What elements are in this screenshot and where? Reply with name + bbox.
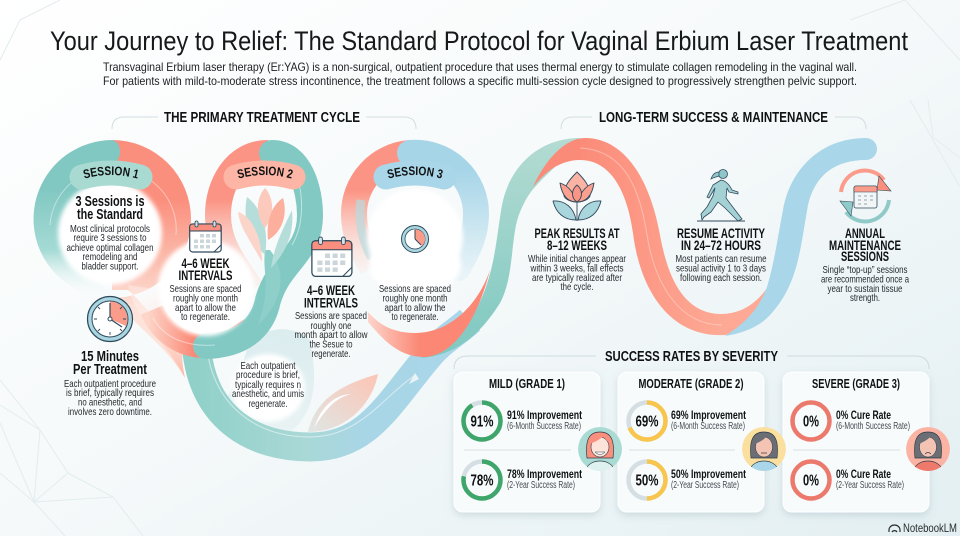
icon: clock xyxy=(88,296,132,342)
text: interval 1: to regenerate. xyxy=(181,311,230,323)
icon: lotus xyxy=(553,172,601,221)
text: interval 2: the Sesue to xyxy=(310,338,353,350)
icon: calendar 1 xyxy=(190,221,221,252)
text: interval 1: apart to allow the xyxy=(175,302,236,314)
text: 3 sessions standard: require 3 sessions to xyxy=(74,232,147,244)
text: annual maintenance: strength. xyxy=(850,292,880,304)
donut: 50% xyxy=(628,462,666,498)
text: resume activity: RESUME ACTIVITY xyxy=(677,226,765,241)
panel: severe: SEVERE (GRADE 3) xyxy=(812,376,900,391)
text: interval 2: INTERVALS xyxy=(304,296,358,310)
ring: session 3 xyxy=(354,153,490,357)
icon: walking woman xyxy=(697,170,745,221)
text: session 3 xyxy=(379,283,451,323)
text: 3 sessions standard xyxy=(66,194,154,272)
text: 3 sessions standard: 3 Sessions is xyxy=(76,194,144,210)
text: session 3: apart to allow the xyxy=(384,302,446,314)
text: annual maintenance: MAINTENANCE xyxy=(829,238,901,253)
intro text xyxy=(103,60,857,88)
panel: mild: (2-Year Success Rate) xyxy=(507,480,575,491)
text: interval 2: regenerate. xyxy=(312,348,350,360)
donut: 0% two year: 0% xyxy=(803,472,819,490)
text: annual maintenance: are recommended once a xyxy=(821,274,909,286)
donut: 0% six month: 0% xyxy=(803,414,819,430)
pill: session 3 xyxy=(374,162,454,190)
text: interval 2: month apart to allow xyxy=(294,329,368,341)
donut: 78% xyxy=(464,462,500,498)
text: peak results: within 3 weeks, fall effects xyxy=(530,262,624,274)
panel: severe: 0% Cure Rate xyxy=(836,410,891,422)
text: resume activity: sesual activity 1 to 3 days xyxy=(676,262,766,274)
donut: 91%: 91% xyxy=(470,414,494,430)
text: peak results: the cycle. xyxy=(560,281,594,293)
text: 15 minutes xyxy=(64,349,156,418)
section heading: long-term success xyxy=(561,110,866,129)
ribbon: lower U connector xyxy=(197,320,470,447)
donut: 0% two year xyxy=(792,462,830,498)
panel: mild: (6-Month Success Rate) xyxy=(507,421,581,432)
text: peak results: 8–12 WEEKS xyxy=(547,238,607,253)
donut: 78%: 78% xyxy=(470,472,494,490)
text: session 3: roughly one month xyxy=(382,292,448,304)
text: interval 1: INTERVALS xyxy=(178,268,232,283)
pill: session 2 xyxy=(224,160,306,190)
icon: annual cycle calendar xyxy=(840,170,891,222)
panel: moderate: 69% Improvement xyxy=(671,410,746,422)
donut: 69% xyxy=(628,402,666,440)
donut: 50%: 50% xyxy=(636,472,659,490)
text: 3 sessions standard: the Standard xyxy=(77,207,143,223)
section heading: primary treatment cycle: THE PRIMARY TREATMENT CYCLE xyxy=(164,110,360,126)
plant motif xyxy=(238,188,292,325)
pill: session 1: SESSION 1 xyxy=(83,166,138,178)
donut: 69%: 69% xyxy=(636,414,659,430)
text: annual maintenance: ANNUAL xyxy=(845,226,885,241)
intro text: For patients with mild-to-moderate stress incontinence, the treatment follows a specific multi-session cycle designed to progressively strengthen pelvic support. xyxy=(103,74,857,88)
text: center outpatient note: anesthetic, and umis xyxy=(232,388,304,400)
text: interval 1: roughly one month xyxy=(173,292,238,304)
center note backing xyxy=(231,354,305,422)
pill: session 3: SESSION 3 xyxy=(387,166,443,178)
panel: moderate: (6-Month Success Rate) xyxy=(671,421,745,432)
section heading: primary treatment cycle xyxy=(112,110,416,129)
panel: moderate: (2-Year Success Rate) xyxy=(671,480,739,491)
text: 15 minutes: 15 Minutes xyxy=(81,349,139,365)
ribbon: blue maintenance curve xyxy=(725,138,877,336)
text: center outpatient note xyxy=(232,360,304,410)
text: center outpatient note: procedure is brief, xyxy=(236,369,300,381)
text: resume activity xyxy=(676,226,767,284)
text: 15 minutes: no anesthetic, and xyxy=(78,396,142,408)
text: 15 minutes: is brief, typically requires xyxy=(66,387,154,399)
text: interval 1 xyxy=(170,256,242,323)
text: interval 2: 4–6 WEEK xyxy=(307,283,355,298)
panel: severe xyxy=(783,372,929,512)
text: interval 2: Sessions are spaced xyxy=(295,310,367,322)
text: annual maintenance: Single “top-up” sessions xyxy=(822,264,908,276)
text: annual maintenance xyxy=(821,226,909,304)
donut: 0% six month xyxy=(792,402,830,440)
ring: session 1 xyxy=(34,140,205,378)
panel: mild: 91% Improvement xyxy=(507,410,582,422)
text: center outpatient note: Each outpatient xyxy=(240,360,296,372)
avatar: neutral woman xyxy=(742,427,786,472)
text: 3 sessions standard: bladder support. xyxy=(82,260,138,272)
donut: 91% xyxy=(464,402,500,440)
text: resume activity: IN 24–72 HOURS xyxy=(681,238,761,253)
section heading: success rates: SUCCESS RATES BY SEVERITY xyxy=(605,349,778,365)
panel: mild: MILD (GRADE 1) xyxy=(489,376,565,391)
panel: moderate xyxy=(618,372,764,512)
text: 3 sessions standard: achieve optimal collagen xyxy=(66,242,154,254)
text: interval 1: Sessions are spaced xyxy=(170,283,242,295)
section heading: success rates xyxy=(454,349,929,369)
panel: mild: 78% Improvement xyxy=(507,469,582,481)
text: interval 2: roughly one xyxy=(310,320,352,332)
text: 15 minutes: Each outpatient procedure xyxy=(64,378,156,390)
text: annual maintenance: year to sustain tissue xyxy=(828,283,903,295)
section heading: long-term success: LONG-TERM SUCCESS & MAINTENANCE xyxy=(599,110,828,126)
icon: small clock xyxy=(402,226,428,252)
text: resume activity: Most patients can resume xyxy=(676,253,767,265)
avatar: happy woman xyxy=(578,427,622,472)
avatar: sad woman xyxy=(906,427,950,472)
panel: severe: (2-Year Success Rate) xyxy=(836,480,904,491)
text: center outpatient note: regenerate. xyxy=(248,398,288,410)
text: peak results: are typically realized after xyxy=(532,272,622,284)
text: 3 sessions standard: Most clinical protocols xyxy=(70,223,150,235)
text: session 3: to regenerate. xyxy=(392,311,438,323)
text: session 3: Sessions are spaced xyxy=(379,283,451,295)
text: resume activity: following each session. xyxy=(680,272,762,284)
text: peak results xyxy=(528,226,626,293)
ring: session 2 xyxy=(152,153,310,346)
text: interval 1: 4–6 WEEK xyxy=(182,256,230,271)
text: center outpatient note: typically requires n xyxy=(235,379,301,391)
intro text: Transvaginal Erbium laser therapy (Er:YAG) is a non-surgical, outpatient procedure that uses thermal energy to stimulate collagen remodeling in the vaginal wall. xyxy=(103,60,857,74)
text: interval 2 xyxy=(294,283,368,360)
pill: session 1 xyxy=(70,160,152,190)
pale stem behind center note xyxy=(225,329,314,432)
text: peak results: While initial changes appear xyxy=(528,253,626,265)
panel: moderate: MODERATE (GRADE 2) xyxy=(638,376,744,391)
text: annual maintenance: SESSIONS xyxy=(841,249,889,264)
panel: severe: 0% Cure Rate xyxy=(836,469,891,481)
text: peak results: PEAK RESULTS AT xyxy=(534,226,620,241)
text: 15 minutes: Per Treatment xyxy=(73,362,147,378)
panel: moderate: 50% Improvement xyxy=(671,469,746,481)
text: 3 sessions standard: remodeling and xyxy=(82,251,138,263)
ribbon: salmon S curve xyxy=(533,138,768,335)
panel: mild xyxy=(454,372,600,512)
leaf motif xyxy=(308,374,378,432)
text: 15 minutes: involves zero downtime. xyxy=(68,406,152,418)
icon: calendar 2 xyxy=(312,237,352,276)
pill: session 2: SESSION 2 xyxy=(237,166,293,178)
ribbon: teal connector to long-term xyxy=(420,138,580,358)
panel: severe: (6-Month Success Rate) xyxy=(836,421,910,432)
